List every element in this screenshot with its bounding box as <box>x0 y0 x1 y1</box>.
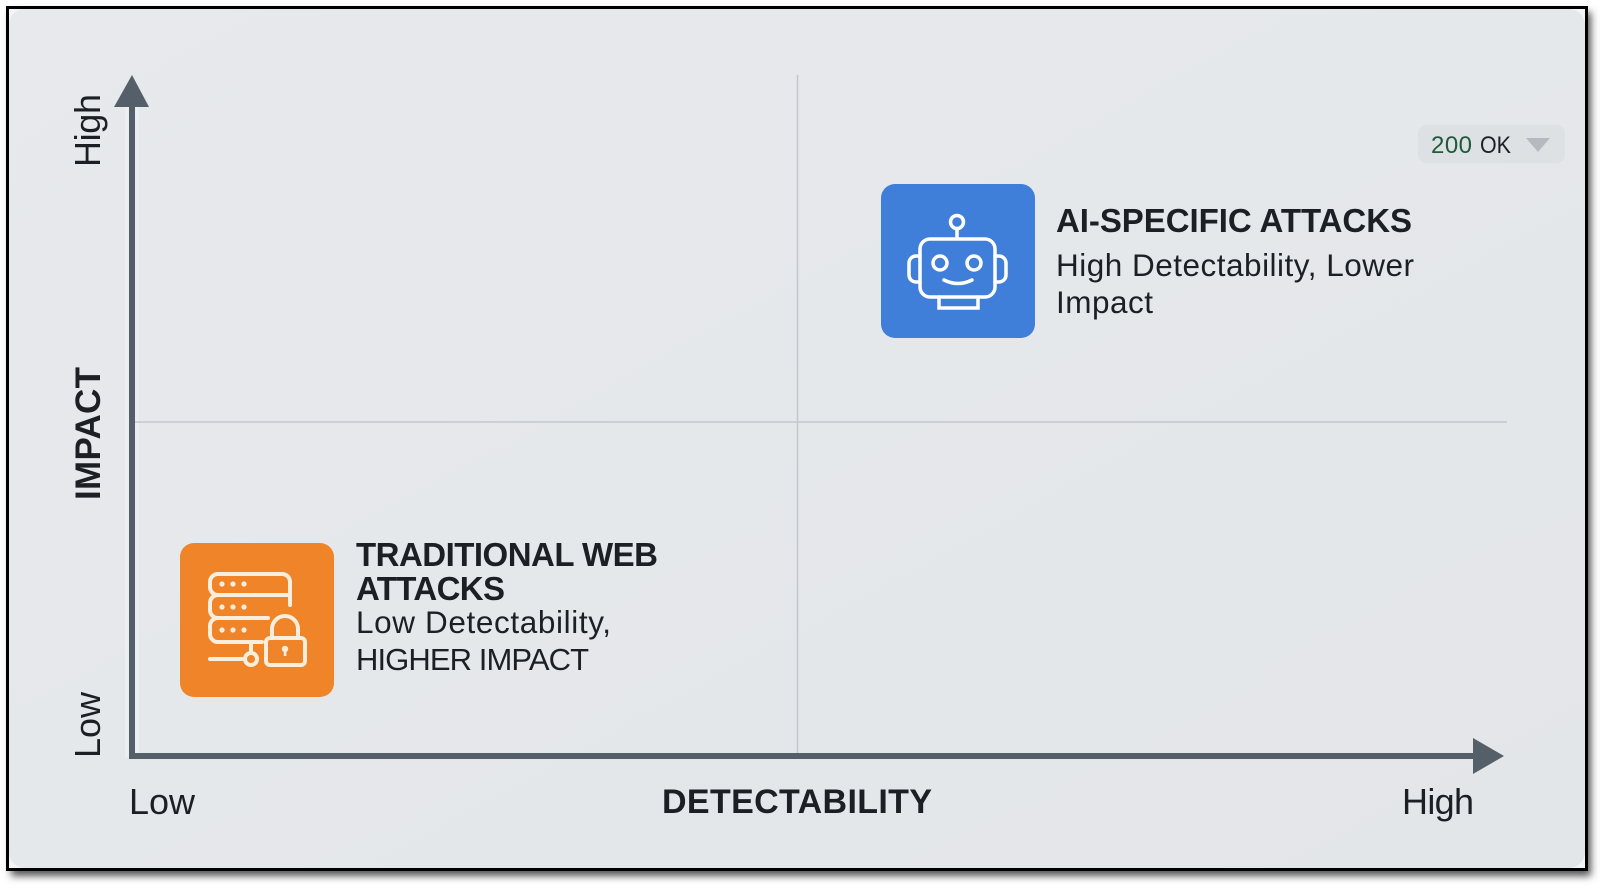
icon: AI robot <box>881 184 1035 338</box>
status badge: 200 OK: OK <box>1480 132 1511 159</box>
arrow: impact axis <box>114 75 149 759</box>
callout: AI-specific attacks: AI-SPECIFIC ATTACKS <box>1056 202 1412 239</box>
callout: traditional web attacks: TRADITIONAL WEB <box>356 536 658 573</box>
icon: web server with lock <box>180 543 334 697</box>
callout: traditional web attacks: HIGHER IMPACT <box>356 642 589 677</box>
axis label: x High: High <box>1402 781 1474 822</box>
callout: AI-specific attacks <box>1056 202 1414 320</box>
axis label: x Low: Low <box>129 781 196 822</box>
callout: AI-specific attacks: Impact <box>1056 284 1153 320</box>
callout: traditional web attacks: ATTACKS <box>356 570 505 607</box>
axis label: y Low: Low <box>67 691 108 758</box>
axis title: DETECTABILITY: DETECTABILITY <box>662 783 932 821</box>
axis label: y High: High <box>67 94 108 167</box>
status badge: 200 OK <box>1418 125 1565 163</box>
callout: traditional web attacks <box>356 536 658 677</box>
quadrant divider: horizontal <box>135 421 1507 423</box>
quadrant divider: vertical <box>796 75 798 753</box>
callout: traditional web attacks: Low Detectability, <box>356 604 611 640</box>
axis title: IMPACT: IMPACT <box>69 367 108 500</box>
arrow: detectability axis <box>129 738 1504 774</box>
callout: AI-specific attacks: High Detectability, Lower <box>1056 247 1414 283</box>
status badge: 200 OK: 200 <box>1431 132 1472 159</box>
